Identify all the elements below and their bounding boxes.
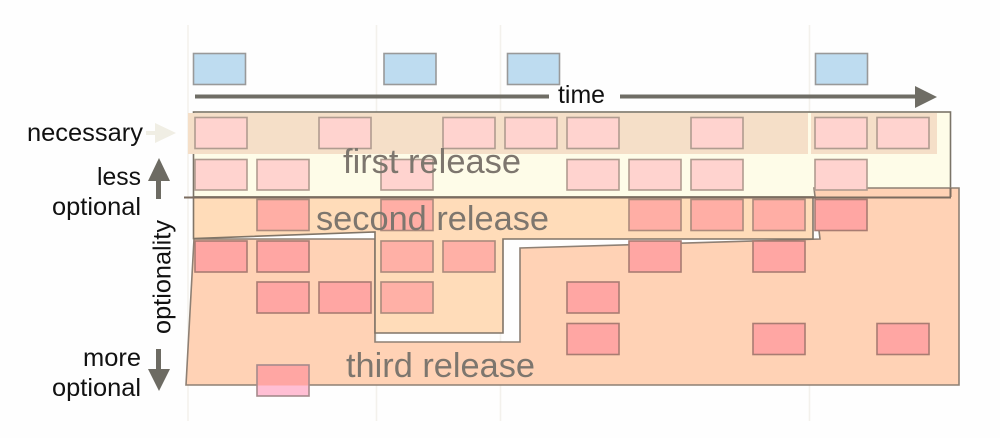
third release area [186, 188, 959, 385]
third release lower items [257, 282, 929, 354]
first release label: first release [343, 143, 521, 181]
necessary items row [195, 118, 929, 148]
time arrow [195, 86, 937, 108]
time label: time [558, 81, 605, 109]
second release items row [257, 200, 805, 230]
second release area [194, 197, 813, 333]
third release item top row [195, 200, 867, 272]
icon: up arrow [148, 158, 170, 199]
necessary label: necessary [27, 119, 143, 147]
less optional items row [195, 160, 867, 190]
first release area [188, 112, 950, 197]
less optional label: less [97, 163, 141, 191]
milestone markers row [194, 54, 868, 84]
necessary band [188, 113, 937, 154]
more optional label: optional [52, 374, 141, 402]
second release lower items [381, 241, 495, 313]
overflowing item [257, 365, 309, 396]
more optional label [52, 344, 141, 402]
more optional label: more [83, 344, 141, 372]
second release label: second release [316, 200, 549, 238]
first release bottom edge [184, 188, 951, 198]
third release label: third release [346, 347, 535, 385]
less optional label: optional [52, 193, 141, 221]
less optional label [52, 163, 141, 221]
icon: necessary arrow [146, 123, 176, 143]
optionality label: optionality [148, 219, 176, 334]
icon: down arrow [148, 349, 170, 391]
